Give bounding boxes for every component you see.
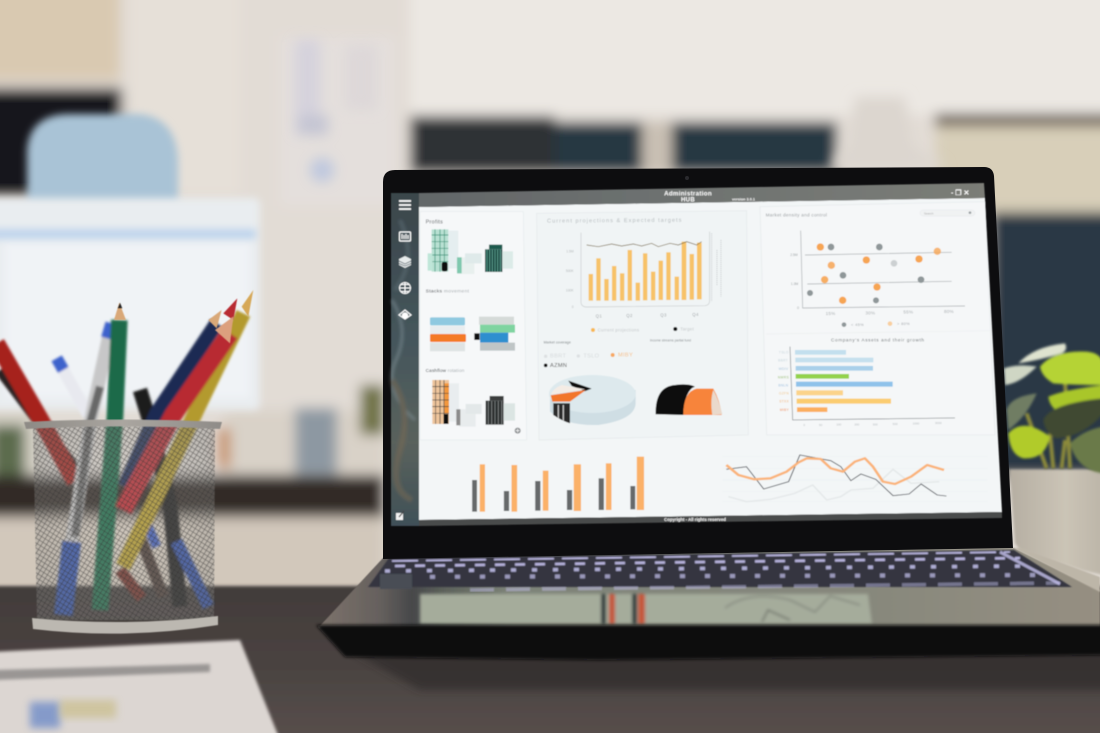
market coverage title: Market coverage xyxy=(544,341,571,345)
pot xyxy=(1009,469,1100,575)
scatter x labels: 15% xyxy=(826,311,835,316)
cup base xyxy=(32,616,218,634)
target line xyxy=(587,242,702,247)
search box xyxy=(920,210,975,216)
wire mesh cup xyxy=(33,426,215,620)
window controls: - ❐ ✕ xyxy=(951,189,969,197)
bar x labels: 0 xyxy=(803,423,805,427)
pie legend: AZMN xyxy=(550,363,567,369)
sidebar xyxy=(391,193,419,526)
pencil holder with pens xyxy=(0,290,253,634)
laptop base deck xyxy=(316,548,1100,660)
pie legend xyxy=(544,352,633,369)
title: Administration xyxy=(664,190,712,198)
scatter y labels: 1.0M xyxy=(791,282,799,286)
scatter title: Market density and control xyxy=(766,213,827,218)
horizontal bars xyxy=(795,350,893,412)
y axis labels: 100K xyxy=(566,288,574,292)
laptop lid xyxy=(383,167,1013,559)
assets axes xyxy=(790,347,955,420)
heading: profits: Profits xyxy=(426,219,443,225)
y axis labels: 0 xyxy=(572,305,574,309)
right axis rotated labels xyxy=(712,233,721,302)
x axis labels: Q4 xyxy=(692,312,699,317)
asset allocation title: Income streams partial fund xyxy=(650,339,691,343)
dark series xyxy=(726,455,946,496)
legend: Current projections xyxy=(598,327,639,332)
version: version 3.0.1 xyxy=(732,198,755,202)
pencils and pens in holder xyxy=(0,313,243,615)
icon: menu xyxy=(399,201,411,209)
leaves xyxy=(1004,343,1100,473)
panel: bottom bar chart xyxy=(472,457,644,512)
background object: desk lamp xyxy=(828,97,946,168)
content background xyxy=(419,198,1002,520)
icon: add button xyxy=(515,428,521,434)
y axis labels: 1.5M xyxy=(566,250,574,254)
bar x labels: 3000 xyxy=(935,421,942,425)
pie legend: MIBY xyxy=(618,352,633,358)
x axis labels: Q2 xyxy=(626,313,633,318)
orange series xyxy=(726,458,944,484)
keyboard xyxy=(368,550,1072,590)
cup rim xyxy=(24,420,222,429)
desk surface xyxy=(0,586,1100,733)
legend: Target xyxy=(680,326,694,331)
assets title: Company's Assets and their growth xyxy=(831,337,924,342)
icon: chart xyxy=(400,232,410,241)
3D half cylinder chart xyxy=(656,384,722,415)
bar labels: BNLN xyxy=(778,384,789,388)
trackpad screen reflection xyxy=(420,594,872,624)
bar labels: WDIV xyxy=(779,367,789,371)
bar x labels: 500 xyxy=(893,422,898,426)
panel: bottom line chart xyxy=(722,455,987,502)
3D pie chart xyxy=(549,375,636,425)
bar labels: STXX xyxy=(779,400,790,404)
bar labels: NWRS xyxy=(778,375,789,379)
pie legend: BBRT xyxy=(550,353,567,359)
heading: stacks: Stacks movement xyxy=(426,289,470,295)
x axis labels xyxy=(596,312,699,319)
footer bar xyxy=(419,512,1002,526)
chart frame xyxy=(581,232,710,307)
scatter legend xyxy=(842,321,910,327)
bar labels xyxy=(778,351,790,412)
bar labels: BBRT xyxy=(778,359,788,363)
bar x labels: 200 xyxy=(854,422,860,426)
scatter legend: < 45% xyxy=(851,322,864,327)
header bar: HUB xyxy=(681,198,695,204)
bar x labels xyxy=(803,421,942,427)
panel: left column xyxy=(420,212,527,440)
panel: current projections chart xyxy=(537,211,748,440)
paper on desk xyxy=(0,640,282,733)
search box: Search xyxy=(924,211,934,215)
front edge xyxy=(316,625,1100,660)
x axis labels: Q1 xyxy=(596,314,602,319)
y axis labels: 500K xyxy=(566,269,574,273)
icon: layers xyxy=(399,256,411,268)
bar x labels: 300 xyxy=(873,422,878,426)
cashflow 3D blocks xyxy=(432,380,515,427)
copyright: Copyright - All rights reserved xyxy=(664,517,726,522)
heading: cashflow: Cashflow rotation xyxy=(426,368,465,373)
gray series xyxy=(728,469,939,502)
bar labels: MIBY xyxy=(780,408,789,412)
scatter x labels xyxy=(826,309,954,316)
scatter x labels: 30% xyxy=(865,310,875,315)
panel: scatter and assets xyxy=(760,202,995,435)
y axis labels xyxy=(566,250,574,309)
scatter axes xyxy=(801,231,965,308)
screen xyxy=(391,183,1002,526)
orange bars xyxy=(589,242,702,301)
scatter points xyxy=(807,243,941,304)
background object: blue chair xyxy=(27,114,178,206)
bar labels: GZFN xyxy=(779,392,789,396)
bar labels: TSLO xyxy=(779,351,789,355)
scatter x labels: 55% xyxy=(903,310,913,315)
scatter y labels: 2.5M xyxy=(790,253,798,257)
x axis labels: Q3 xyxy=(660,313,667,318)
chart title: Current projections & Expected targets xyxy=(547,218,682,225)
background object: wall poster marks xyxy=(295,40,377,182)
bar x labels: 100 xyxy=(836,423,842,427)
bar x labels: 1000 xyxy=(913,422,920,426)
icon: globe xyxy=(400,282,410,294)
legend xyxy=(591,326,694,332)
scatter y labels xyxy=(790,253,799,310)
bar x labels: 50 xyxy=(819,423,823,427)
scatter x labels: 80% xyxy=(944,309,954,314)
header bar xyxy=(419,183,985,207)
plant in pot xyxy=(1004,343,1100,575)
laptop shadow on desk xyxy=(350,650,1100,690)
scatter y labels: 0 xyxy=(797,306,799,310)
profit 3D blocks xyxy=(428,229,513,274)
right silver edge xyxy=(1014,548,1100,592)
stacks 3D blocks xyxy=(430,317,515,351)
icon: edit xyxy=(396,511,404,520)
pie legend: TSLO xyxy=(583,353,600,359)
webcam xyxy=(685,176,689,180)
laptop xyxy=(316,167,1100,660)
scatter legend: > 80% xyxy=(897,321,910,326)
background object: desktop monitor xyxy=(0,198,260,410)
icon: cloud xyxy=(399,310,411,319)
